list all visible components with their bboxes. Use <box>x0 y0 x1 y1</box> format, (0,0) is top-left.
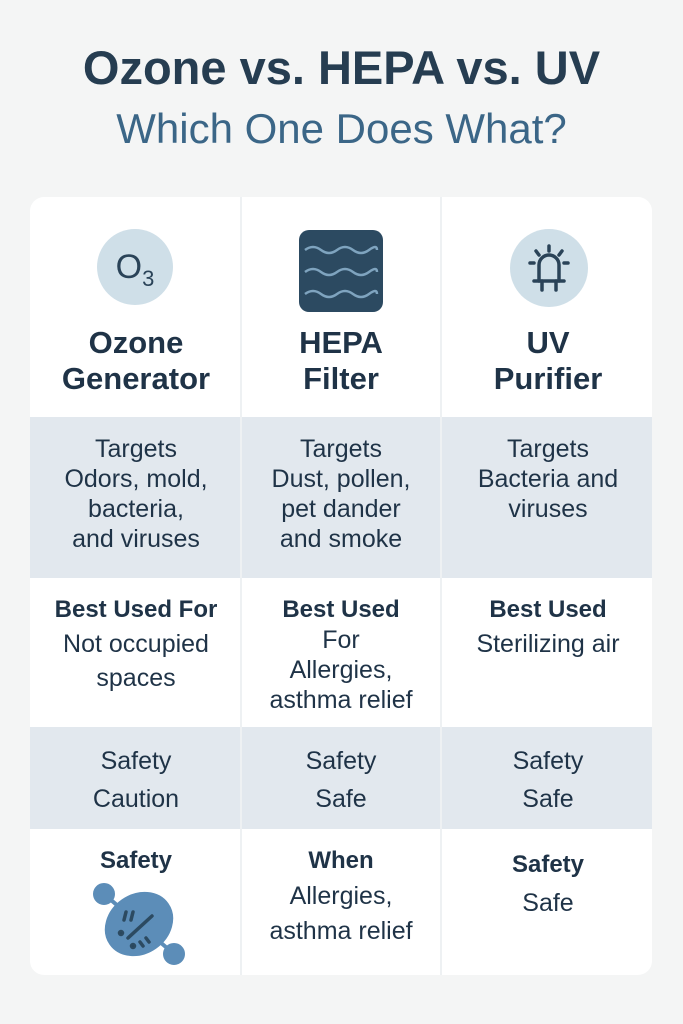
row: last: Allergies, <box>290 882 392 910</box>
row: safety: Safety <box>101 747 171 775</box>
row: best used for: asthma relief <box>269 686 413 714</box>
row: targets: and viruses <box>72 525 200 553</box>
row: last: Safe <box>522 889 574 917</box>
text: UV <box>526 325 570 360</box>
row: last <box>100 847 584 945</box>
row: safety <box>93 747 584 813</box>
row: last: Safety <box>100 847 172 874</box>
row: safety: Safety <box>306 747 376 775</box>
title: Ozone vs. HEPA vs. UV <box>83 41 600 94</box>
row: targets: bacteria, <box>88 495 184 523</box>
row: targets <box>64 435 618 553</box>
row: best used for: Best Used <box>489 596 607 623</box>
text: HEPA <box>299 325 383 360</box>
row: safety: Safe <box>522 785 574 813</box>
row: safety: Caution <box>93 785 179 813</box>
column headers: Ozone <box>89 325 183 360</box>
row: targets: Dust, pollen, <box>272 465 410 493</box>
row: best used for: Allergies, <box>290 656 392 684</box>
icon: HEPA filter <box>299 230 383 312</box>
row: best used for: Best Used For <box>55 596 217 623</box>
row: targets: Bacteria and <box>478 465 618 493</box>
row: best used for <box>55 596 620 714</box>
row: targets: viruses <box>508 495 588 523</box>
text: Filter <box>303 361 379 396</box>
column headers <box>62 325 210 396</box>
row: last: Safety <box>512 851 584 878</box>
row: targets: Targets <box>95 435 177 463</box>
text: Purifier <box>494 361 602 396</box>
row: last: asthma relief <box>269 917 413 945</box>
row: safety: Safety <box>513 747 583 775</box>
subtitle: Which One Does What? <box>116 105 567 152</box>
icon: O3 <box>97 229 173 305</box>
column headers: Generator <box>62 361 210 396</box>
row: targets: Targets <box>507 435 589 463</box>
icon: UV lamp <box>510 229 588 307</box>
row: best used for: For <box>322 626 360 654</box>
row: best used for: Best Used <box>282 596 400 623</box>
row: safety: Safe <box>315 785 367 813</box>
comparison table <box>30 197 652 975</box>
row: targets: and smoke <box>280 525 402 553</box>
icon: O3: O3 <box>116 248 154 291</box>
row: targets: Targets <box>300 435 382 463</box>
row: targets: Odors, mold, <box>64 465 208 493</box>
row: targets: pet dander <box>281 495 401 523</box>
row: last: When <box>308 847 374 874</box>
icon: bacteria <box>93 883 185 965</box>
row: best used for: spaces <box>96 664 176 692</box>
row: best used for: Sterilizing air <box>476 630 620 658</box>
row: best used for: Not occupied <box>63 630 209 658</box>
